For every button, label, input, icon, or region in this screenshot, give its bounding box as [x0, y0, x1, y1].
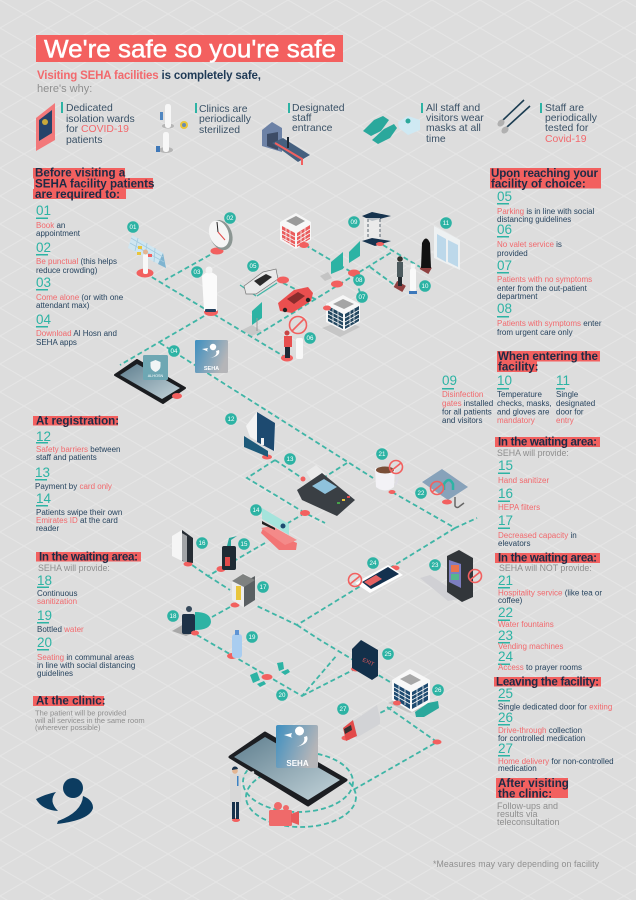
item 05	[497, 189, 595, 224]
heading: in the waiting area: In the waiting area:	[498, 552, 597, 564]
number badges: 16	[199, 540, 206, 547]
number badges: 10	[422, 283, 429, 290]
panel: waiting area, will not provide	[495, 552, 602, 672]
heading: before visiting	[33, 167, 154, 201]
item 26	[498, 710, 585, 743]
item 26: 26	[498, 710, 513, 725]
illustration: HEPA filter, step 16	[172, 530, 193, 566]
item 19: 19	[37, 608, 52, 623]
item 23	[498, 628, 563, 651]
item 13: Payment by card only	[35, 482, 112, 491]
illustration: temperature check, step 10	[394, 238, 432, 294]
number badges: 26	[435, 687, 442, 694]
illustration: no hot drinks, step 21	[375, 460, 402, 494]
illustration: elevator, step 17	[230, 573, 255, 608]
safety point: isolation wards: for COVID-19	[66, 124, 129, 135]
dashed journey paths	[120, 245, 477, 827]
number badges: 23	[432, 562, 439, 569]
item 22: 22	[498, 605, 513, 620]
item 05: 05	[497, 189, 512, 204]
icon: door	[36, 103, 55, 151]
item 09: Disinfection	[442, 390, 483, 399]
item 26: Drive-through collection	[498, 726, 582, 735]
icon: gloves and mask	[363, 116, 420, 144]
safety point: masks: All staff and	[426, 103, 480, 114]
item 12: 12	[36, 429, 51, 444]
item 07: 07	[497, 258, 512, 273]
safety point: clinics sterilized: Clinics are	[199, 104, 248, 115]
item 27: Home delivery for non-controlled	[498, 757, 614, 766]
panel: before visiting	[33, 167, 154, 347]
heading: at the clinic: At the clinic:	[36, 694, 106, 708]
illustration: red hospital	[280, 213, 311, 249]
illustration: card reader, step 13	[297, 465, 355, 516]
item 26: for controlled medication	[498, 734, 585, 743]
item 25	[498, 686, 612, 712]
illustration: single door, step 11	[434, 226, 460, 270]
number badges: 27	[340, 706, 347, 713]
item 04	[36, 312, 117, 347]
safety point: masks: masks at all	[426, 123, 481, 134]
heading: in the waiting area: In the waiting area:	[498, 436, 597, 448]
icon: entrance gate	[262, 122, 310, 165]
number badges: 18	[170, 613, 177, 620]
illustration: registration barrier, step 12	[244, 412, 275, 460]
heading: upon reaching	[490, 167, 601, 190]
item 19: Bottled water	[37, 625, 84, 634]
subtitle	[37, 70, 261, 95]
app tile: SEHA: SEHA	[204, 366, 219, 372]
safety point: staff tested: Covid-19	[545, 134, 587, 145]
item 09: gates installed	[442, 399, 493, 408]
safety point: masks	[363, 103, 484, 145]
number badges: 05	[250, 263, 257, 270]
item 10: 10	[497, 373, 512, 388]
number badges	[127, 212, 452, 715]
item 22: Water fountains	[498, 620, 554, 629]
item 02	[36, 240, 117, 275]
item 20	[37, 635, 135, 678]
subheading: SEHA will provide: SEHA will provide:	[38, 563, 110, 573]
illustration: disinfection gate, step 9	[362, 212, 391, 246]
item 06: 06	[497, 222, 512, 237]
item 03	[36, 275, 124, 310]
illustration: man alone, step 3	[202, 266, 218, 316]
item 04: 04	[36, 312, 52, 327]
item 14: reader	[36, 524, 59, 533]
item 23: Vending machines	[498, 642, 563, 651]
safety point: masks: visitors wear	[426, 113, 484, 124]
item 02: reduce crowding)	[36, 266, 98, 275]
item 08: 08	[497, 301, 512, 316]
number badges: 12	[228, 416, 235, 423]
safety point: isolation wards: patients	[66, 135, 102, 146]
item 21: 21	[498, 573, 513, 588]
item 21: Hospitality service (like tea or	[498, 588, 602, 598]
illustration: water fountain, step 22	[422, 469, 468, 508]
icon: sterilizing staff	[156, 104, 188, 153]
heading: when entering	[497, 350, 600, 374]
item 23: 23	[498, 628, 513, 643]
item 20: Seating in communal areas	[37, 653, 134, 662]
number badges: 08	[356, 277, 363, 284]
item 02: 02	[36, 240, 51, 255]
text: follow-ups: results via	[497, 809, 538, 819]
item 11: 11	[556, 373, 570, 388]
illustration: distanced seating, step 20	[250, 662, 290, 687]
heading: after visiting: After visiting	[498, 777, 569, 790]
safety point: staff entrance: staff	[292, 113, 312, 124]
number badges: 17	[260, 584, 267, 591]
number badges: 14	[253, 507, 260, 514]
item 12: Safety barriers between	[36, 445, 120, 454]
illustration: parking sign	[242, 302, 262, 336]
item 02: Be punctual (this helps	[36, 257, 117, 266]
panel: at registration	[33, 414, 122, 533]
number badges: 24	[370, 560, 377, 567]
safety point: isolation wards: Dedicated	[66, 103, 113, 114]
safety point: clinics sterilized: sterilized	[199, 125, 240, 136]
item 10: mandatory	[497, 416, 535, 425]
text: follow-ups: Follow-ups and	[497, 801, 558, 811]
number badges: 07	[359, 294, 366, 301]
text: clinic note: will all services in the same room	[34, 716, 145, 725]
illustration: phone and apps, step 4	[115, 340, 228, 403]
item 03: 03	[36, 275, 51, 290]
item 16: HEPA filters	[498, 503, 540, 512]
item 20: in line with social distancing	[37, 661, 135, 670]
safety point: masks: time	[426, 134, 446, 145]
item 14	[36, 491, 122, 533]
item 13	[35, 465, 112, 491]
subheading: SEHA will NOT provide: SEHA will NOT provide:	[499, 563, 592, 573]
item 09: for all patients	[442, 408, 492, 416]
illustration: exit door, step 25: EXIT	[361, 657, 375, 668]
pin: final stop	[432, 740, 442, 744]
number badges: 21	[379, 451, 386, 458]
number badges: 11	[443, 220, 450, 227]
subtitle: Visiting SEHA facilities is completely safe,	[37, 70, 261, 82]
heading: at registration: At registration:	[36, 414, 119, 428]
item 05: distancing guidelines	[497, 215, 571, 224]
illustration: calendar, step 1	[128, 235, 166, 278]
item 21	[498, 573, 602, 605]
item 07	[497, 258, 592, 301]
text: follow-ups: teleconsultation	[497, 817, 560, 827]
item 17: 17	[498, 513, 513, 528]
item 01: appointment	[36, 229, 81, 238]
illustration: vending machine, step 23	[420, 550, 482, 602]
number badges: 25	[385, 651, 392, 658]
safety point: isolation wards: isolation wards	[66, 114, 135, 125]
item 09: and visitors	[442, 416, 482, 425]
item 15: 15	[498, 458, 513, 473]
item 14: 14	[36, 491, 52, 506]
safety point: clinics sterilized	[156, 103, 252, 153]
item 10: Temperature	[497, 390, 542, 399]
heading: before visiting: are required to:	[35, 188, 120, 201]
safety point: clinics sterilized: periodically	[199, 114, 252, 125]
item 14: Patients swipe their own	[36, 508, 122, 517]
number badges: 19	[249, 634, 256, 641]
item 06	[497, 222, 562, 258]
item 15: Hand sanitizer	[498, 476, 549, 485]
item 10: checks, masks,	[497, 399, 552, 408]
item 21: coffee)	[498, 596, 523, 605]
heading: before visiting: Before visiting a	[35, 167, 126, 180]
item 20: guidelines	[37, 669, 73, 678]
number badges: 22	[418, 490, 425, 497]
number badges: 06	[307, 335, 314, 342]
item 08: from urgent care only	[497, 328, 573, 337]
item 18: sanitization	[37, 597, 77, 606]
item 07: department	[497, 292, 538, 301]
doctor	[230, 766, 254, 822]
safety point: staff entrance: entrance	[292, 123, 333, 134]
item 12: staff and patients	[36, 453, 97, 462]
heading: when entering: facility:	[498, 360, 539, 374]
item 04: SEHA apps	[36, 338, 77, 347]
panel: waiting area, will provide	[495, 436, 600, 548]
icon: swabs	[496, 100, 530, 135]
panel: leaving the facility	[494, 675, 614, 773]
text: clinic note: (wherever possible)	[35, 723, 101, 732]
item 03: attendant max)	[36, 301, 90, 310]
subheading: SEHA will provide: SEHA will provide:	[497, 448, 569, 458]
item 09	[442, 373, 493, 425]
number badges: 03	[194, 269, 201, 276]
item 24	[498, 649, 582, 672]
item 07: Patients with no symptoms	[497, 275, 592, 284]
safety point: isolation wards	[36, 102, 135, 151]
illustration: water bottle, step 19	[227, 630, 242, 659]
illustration: prayer room closed, step 24	[348, 565, 403, 593]
safety point: staff entrance	[262, 103, 345, 165]
number badges: 20	[279, 692, 286, 699]
number badges: 15	[241, 541, 248, 548]
number badges: 04	[171, 348, 178, 355]
illustration: teleconsultation phone	[230, 725, 346, 826]
item 06: provided	[497, 249, 528, 258]
illustration: exit door, step 25	[351, 640, 378, 680]
panel: at the clinic	[33, 694, 145, 732]
icon: video camera	[269, 802, 299, 826]
item 01: Book an	[36, 221, 65, 230]
item 11: Single	[556, 390, 579, 399]
heading: before visiting: SEHA facility patients	[35, 178, 154, 191]
item 10: and gloves are	[497, 408, 550, 416]
panel: when entering facility	[442, 350, 600, 425]
item 27: 27	[498, 741, 513, 756]
heading: when entering: When entering the	[498, 350, 599, 363]
illustration: hand sanitizer, step 15	[216, 536, 237, 572]
number badges: 13	[287, 456, 294, 463]
number badges: 02	[227, 215, 234, 222]
item 09: 09	[442, 373, 457, 388]
illustration: no valet, step 6	[281, 316, 306, 362]
item 16	[498, 486, 540, 512]
item 05: Parking is in line with social	[497, 207, 594, 216]
panel: upon reaching facility	[490, 167, 602, 337]
item 17	[498, 513, 577, 548]
illustration: parking cars, step 5	[244, 269, 313, 313]
item 06: No valet service is	[497, 240, 562, 249]
item 11: entry	[556, 416, 574, 425]
illustration: delivery truck, step 27	[342, 705, 380, 741]
item 19	[37, 608, 84, 634]
safety point: staff tested: Staff are	[545, 103, 584, 114]
heading: upon reaching: facility of choice:	[491, 177, 586, 190]
item 22	[498, 605, 554, 629]
heading: after visiting	[496, 777, 569, 800]
safety point: staff tested: periodically	[545, 113, 598, 124]
text: clinic note: The patient will be provided	[35, 708, 126, 718]
safety point: staff tested: tested for	[545, 123, 589, 134]
footnote: *Measures may vary depending on facility	[433, 859, 600, 869]
panel: waiting area, left	[36, 550, 141, 678]
item 15	[498, 458, 549, 485]
item 25: 25	[498, 686, 513, 701]
item 04: Download Al Hosn and	[36, 329, 117, 338]
item 08: Patients with symptoms enter	[497, 319, 602, 328]
item 18: Continuous	[37, 589, 77, 598]
app tile: big SEHA: SEHA	[286, 759, 309, 768]
illustration: Emirates ID card, step 14	[261, 508, 297, 550]
number badges: 09	[351, 219, 358, 226]
item 13: 13	[35, 465, 50, 480]
item 18	[37, 573, 77, 606]
item 27: medication	[498, 764, 537, 773]
item 18: 18	[37, 573, 52, 588]
safety point: staff entrance: Designated	[292, 103, 345, 114]
title: We're safe so you're safe	[44, 36, 336, 64]
item 01	[36, 203, 81, 238]
item 11	[556, 373, 595, 425]
item 17: Decreased capacity in	[498, 531, 577, 540]
item 03: Come alone (or with one	[36, 293, 123, 302]
heading: after visiting: the clinic:	[498, 788, 552, 800]
logo	[36, 778, 93, 824]
heading: upon reaching: Upon reaching your	[491, 167, 598, 180]
illustration: clock, step 2	[205, 217, 237, 254]
item 25: Single dedicated door for exiting	[498, 702, 612, 712]
heading: in the waiting area: In the waiting area:	[39, 550, 138, 564]
number badges: 01	[130, 224, 137, 231]
item 16: 16	[498, 486, 513, 501]
illustration: hospital with drive-through, step 26	[388, 669, 439, 717]
app tile: Al Hosn: ALHOSN	[148, 374, 164, 378]
illustration: signs, step 8	[320, 241, 360, 288]
item 24: 24	[498, 649, 514, 664]
subtitle: here's why:	[37, 83, 92, 95]
item 11: door for	[556, 408, 584, 416]
item 10	[497, 373, 552, 425]
panel: after visiting	[496, 777, 569, 827]
item 07: enter from the out-patient	[497, 284, 588, 293]
item 14: Emirates ID at the card	[36, 516, 118, 525]
item 17: elevators	[498, 539, 530, 548]
item 01: 01	[36, 203, 51, 218]
heading: leaving: Leaving the facility:	[496, 675, 599, 688]
item 24: Access to prayer rooms	[498, 663, 582, 672]
item 27	[498, 741, 614, 773]
item 20: 20	[37, 635, 52, 650]
item 12	[36, 429, 120, 462]
item 08	[497, 301, 602, 337]
item 11: designated	[556, 399, 595, 408]
safety point: staff tested	[496, 100, 598, 145]
illustration: dark hospital, step 7	[322, 295, 360, 337]
illustration: sanitization station, step 18	[172, 606, 211, 636]
